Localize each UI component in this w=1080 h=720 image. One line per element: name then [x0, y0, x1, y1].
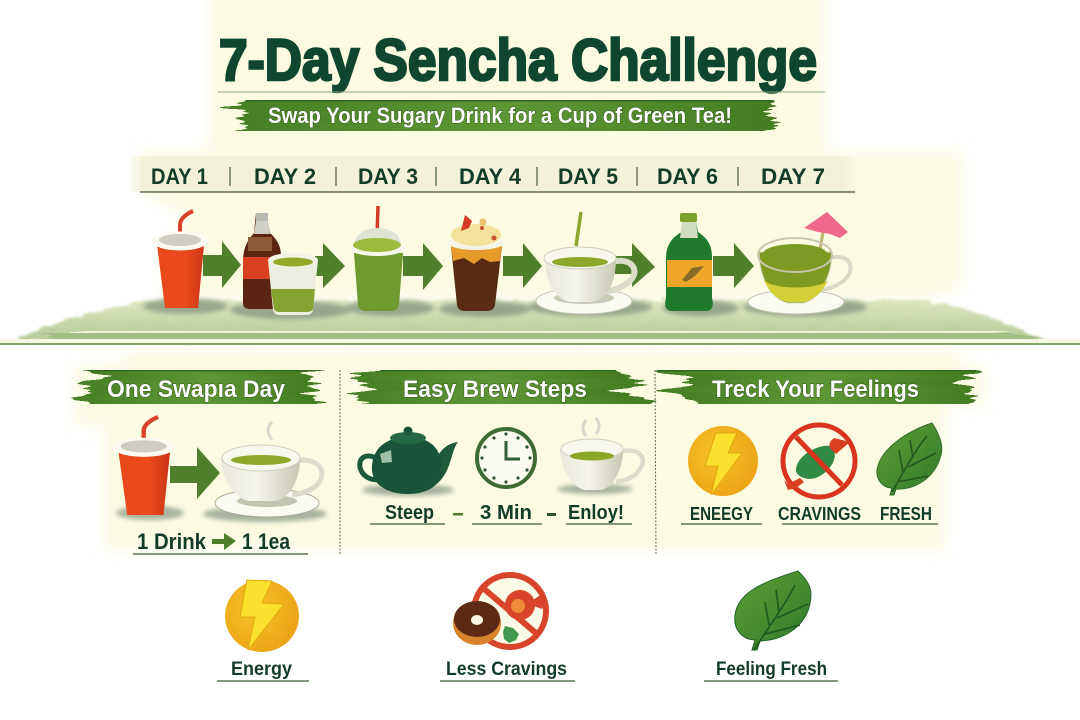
feeling labels: [681, 504, 938, 524]
step labels: Steep: [385, 502, 434, 524]
caption: 1 drink to 1 tea: 1 1ea: [242, 529, 291, 554]
heading banner: one swap a day: [84, 370, 314, 404]
icon: leaf large: [735, 571, 811, 650]
day header bar: DAY 2: [254, 164, 316, 189]
feeling labels: ENEEGY: [690, 504, 753, 524]
benefit: less cravings: [440, 575, 575, 681]
shadows under swap icons: [116, 506, 327, 522]
feeling labels: CRAVINGS: [778, 504, 861, 524]
icon: energy coin large: [225, 580, 299, 652]
step labels: Enloy!: [568, 502, 624, 524]
feeling labels: FRESH: [880, 504, 932, 524]
step labels: 3 Min: [480, 502, 532, 524]
heading banner: easy brew steps: [362, 370, 630, 404]
icon: day 6 green bottle: [665, 213, 713, 311]
panel: track your feelings: [678, 370, 968, 524]
caption: 1 drink to 1 tea: 1 Drink: [137, 529, 207, 554]
title: 7-Day Sencha Challenge: [219, 28, 817, 93]
subtitle banner: Swap Your Sugary Drink for a Cup of Green Tea!: [268, 103, 732, 128]
icon: day 3 green iced drink: [349, 206, 405, 311]
day header bar: DAY 6: [657, 164, 718, 189]
subtitle banner: [218, 92, 825, 131]
heading banner: one swap a day: One Swapıa Day: [107, 376, 286, 403]
icon: clock: [477, 429, 535, 487]
day header bar: [128, 156, 858, 192]
icon: tea cup with steam: [557, 418, 643, 494]
arrow: [170, 447, 220, 499]
icon: tea cup and saucer: [215, 422, 322, 517]
heading banner: easy brew steps: Easy Brew Steps: [403, 376, 587, 403]
day header bar: DAY 5: [558, 164, 618, 189]
icon: no candy: [783, 425, 855, 497]
day header bar: DAY 3: [358, 164, 418, 189]
icon: day 4 iced coffee with topping: [448, 215, 504, 311]
panel: easy brew steps: [360, 370, 643, 524]
day header bar: DAY 4: [459, 164, 522, 189]
icon: fresh leaf: [877, 423, 942, 495]
arrow 4: [503, 243, 542, 288]
caption: 1 drink to 1 tea: [133, 529, 308, 554]
background: cream washes: [75, 0, 985, 550]
icon: red soda cup: [113, 417, 174, 515]
day header bar: DAY 7: [761, 164, 825, 189]
icon: no donut or candy: [453, 575, 546, 647]
day header bar: DAY 1: [151, 164, 208, 189]
arrow 3: [403, 243, 443, 290]
step labels: [370, 502, 632, 524]
benefit: energy: [217, 580, 309, 681]
benefit: feeling fresh: [704, 571, 838, 681]
label: energy: Energy: [231, 659, 292, 680]
icon: day 5 tea cup with straw: [536, 212, 634, 314]
icon: teapot: [360, 426, 458, 496]
panel: one swap a day: [84, 370, 327, 554]
icon: day 7 glass cup with umbrella: [748, 212, 851, 314]
arrow 6: [713, 243, 754, 288]
item shadows: [143, 298, 867, 319]
arrow 1: [203, 241, 241, 288]
icon: energy coin: [688, 426, 758, 496]
label: feeling fresh: Feeling Fresh: [716, 659, 827, 680]
icon: day 1 red soda cup: [152, 211, 208, 308]
arrow 2: [315, 243, 345, 288]
arrow 5: [615, 243, 655, 287]
heading banner: track your feelings: Treck Your Feelings: [712, 376, 919, 403]
label: less cravings: Less Cravings: [446, 659, 567, 680]
section divider lines: [340, 370, 656, 555]
icon: day 2 cola bottle and green tea glass: [243, 213, 318, 315]
heading banner: track your feelings: [678, 370, 968, 404]
ground band with stripes: [0, 300, 1080, 345]
